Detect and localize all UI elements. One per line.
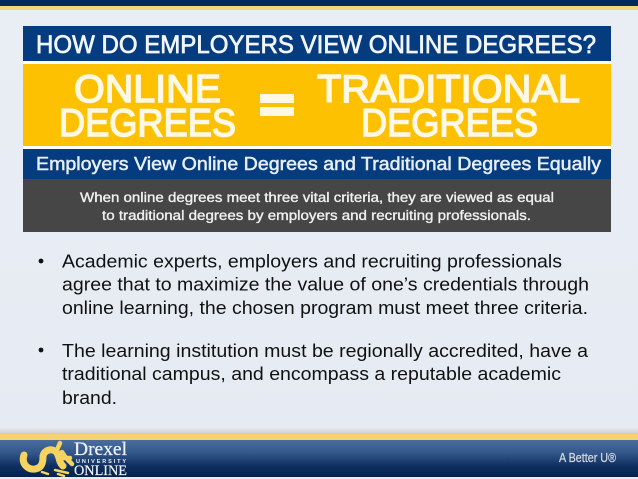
- online degrees label: ONLINE: [74, 68, 221, 111]
- online degrees label: DEGREES: [59, 102, 236, 145]
- subheading band: Employers View Online Degrees and Traditional Degrees Equally: [36, 154, 601, 174]
- bullet: three criteria: Academic experts, employers and recruiting professionals: [62, 252, 562, 272]
- traditional degrees label: [317, 68, 580, 145]
- equals sign: [260, 94, 294, 116]
- logotype: Drexel University Online: ONLINE: [74, 463, 127, 479]
- summary band: When online degrees meet three vital criteria, they are viewed as equal: [80, 190, 554, 205]
- equation band: [23, 64, 611, 146]
- online degrees label: [59, 68, 236, 145]
- bullet: three criteria: online learning, the chosen program must meet three criteria.: [62, 298, 588, 318]
- bullet: three criteria: agree that to maximize the value of one’s credentials through: [62, 274, 589, 294]
- bullet: institution requirements: brand.: [62, 388, 117, 408]
- traditional degrees label: TRADITIONAL: [317, 68, 580, 111]
- bullet: institution requirements: The learning institution must be regionally accredited, have a: [62, 341, 589, 361]
- summary band: [23, 179, 611, 232]
- summary band: to traditional degrees by employers and recruiting professionals.: [102, 208, 531, 223]
- logotype: Drexel University Online: UNIVERSITY: [76, 459, 126, 465]
- traditional degrees label: DEGREES: [361, 102, 538, 145]
- bullet: three criteria: [39, 252, 589, 318]
- footer band: [0, 428, 638, 479]
- bullet: institution requirements: [39, 341, 589, 408]
- infographic panel: [23, 26, 611, 232]
- tagline: A Better U: A Better U®: [559, 450, 616, 465]
- heading band: HOW DO EMPLOYERS VIEW ONLINE DEGREES?: [36, 31, 596, 59]
- logotype: Drexel University Online: Drexel: [74, 439, 127, 460]
- subheading band: [23, 149, 611, 179]
- top band: [0, 0, 638, 10]
- logotype: Drexel University Online: [74, 439, 127, 479]
- icon: Drexel dragon: [23, 443, 72, 476]
- bullet: institution requirements: traditional campus, and encompass a reputable academic: [62, 364, 561, 384]
